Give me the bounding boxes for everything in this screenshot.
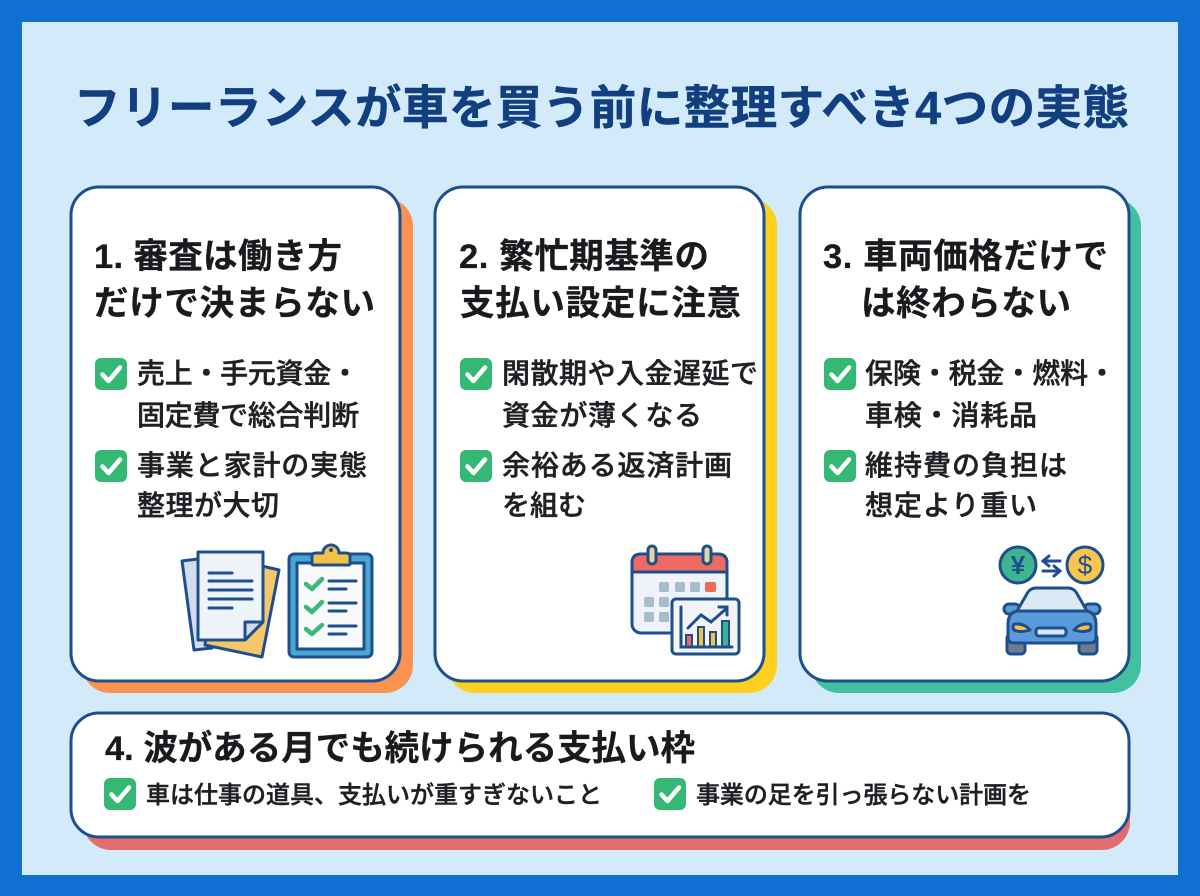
title: フリーランスが車を買う前に整理すべき4つの実態 [74,82,1129,134]
card 2 heading: 支払い設定に注意 [460,285,741,323]
panel: card 2 [435,187,777,693]
icon: clipboard [289,545,372,657]
card 4 bullet 1: 車は仕事の道具、支払いが重すぎないこと [146,782,602,809]
card 1 shadow [82,198,413,693]
card 3 shadow [811,198,1141,693]
card 2 bullet 2: 余裕ある返済計画 [502,450,732,481]
icon: calendar with chart [632,546,739,654]
card 2 body [435,187,764,681]
card 4 bullet 2: 事業の足を引っ張らない計画を [696,782,1031,809]
icon: car with currency exchange [1000,547,1103,654]
card 4 heading: 4. 波がある月でも続けられる支払い枠 [105,729,695,768]
card 2 shadow [447,198,777,693]
panel: card 1 [71,187,413,693]
icon: car with currency exchange: ¥ [1011,550,1026,580]
card 1 bullet 1 [95,358,359,431]
card 3 bullet 1: 保険・税金・燃料・ [865,358,1116,389]
card 3 heading: 3. 車両価格だけで [823,238,1108,276]
icon: car with currency exchange: $ [1078,550,1093,580]
card 1 bullet 1: 売上・手元資金・ [137,358,359,389]
card 2 bullet 1: 資金が薄くなる [502,400,702,431]
card 3 heading [823,238,1108,323]
card 1 bullet 2: 整理が大切 [137,490,279,521]
card 3 body [800,187,1129,681]
card 2 heading: 2. 繁忙期基準の [459,238,709,276]
card 1 bullet 2: 事業と家計の実態 [137,450,367,481]
card 1 heading: 1. 審査は働き方 [94,238,342,276]
card 2 bullet 2: を組む [502,490,586,521]
card 1 bullet 2 [95,450,367,521]
card 4 shadow [83,724,1130,850]
card 2 heading [459,238,741,323]
card 3 heading: は終わらない [861,285,1071,323]
card 1 bullet 1: 固定費で総合判断 [137,400,359,431]
card 3 bullet 2: 想定より重い [865,490,1037,521]
card 2 bullet 1 [460,358,758,431]
panel: card 4 [71,713,1130,850]
card 3 bullet 2: 維持費の負担は [865,450,1067,481]
panel: card 3 [800,187,1141,693]
card 3 bullet 2 [824,450,1067,521]
card 2 bullet 2 [460,450,732,521]
card 1 heading [94,238,375,323]
card 4 body [71,713,1129,837]
card 1 body [71,187,400,681]
icon: documents [182,552,279,657]
card 3 bullet 1: 車検・消耗品 [865,400,1037,431]
card 3 bullet 1 [824,358,1116,431]
card 1 heading: だけで決まらない [94,285,375,323]
card 2 bullet 1: 閑散期や入金遅延で [502,358,758,389]
